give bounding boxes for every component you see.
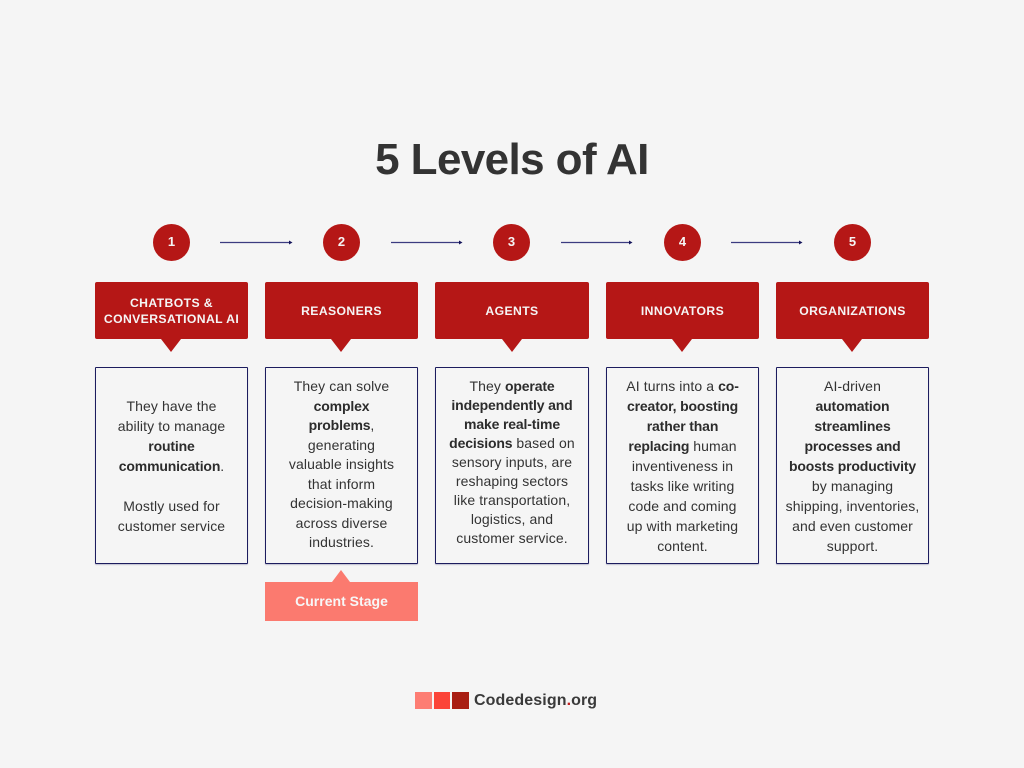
step 5 circle xyxy=(834,224,871,261)
panel: innovators description: creator, boosting xyxy=(627,398,738,414)
panel: organizations description: support. xyxy=(827,538,878,554)
panel: reasoners description: They can solve xyxy=(294,378,389,394)
panel: innovators description xyxy=(606,367,759,564)
header: chatbots xyxy=(95,282,248,339)
panel: reasoners description: industries. xyxy=(309,534,374,550)
panel: chatbots description: customer service xyxy=(118,518,225,534)
header: organizations xyxy=(776,282,929,339)
panel: organizations description: streamlines xyxy=(814,418,891,434)
header: reasoners xyxy=(265,282,418,339)
panel: reasoners description: complex xyxy=(314,398,369,414)
panel: innovators description: replacing human xyxy=(628,438,737,454)
logo squares xyxy=(415,692,469,709)
panel: innovators description: tasks like writing xyxy=(631,478,734,494)
header: chatbots: CHATBOTS & xyxy=(130,296,213,310)
header: innovators: INNOVATORS xyxy=(641,304,724,318)
title: 5 Levels of AI xyxy=(375,135,649,184)
panel: innovators description: content. xyxy=(657,538,708,554)
step 3 circle xyxy=(493,224,530,261)
header: chatbots: CONVERSATIONAL AI xyxy=(104,312,239,326)
panel: innovators description: inventiveness in xyxy=(632,458,733,474)
panel: organizations description: automation xyxy=(816,398,889,414)
panel: reasoners description: decision-making xyxy=(290,495,393,511)
step 1 circle: 1 xyxy=(168,234,175,249)
panel: agents description: decisions based on xyxy=(449,435,575,451)
panel: reasoners description: that inform xyxy=(308,476,375,492)
panel: chatbots description: routine xyxy=(148,438,195,454)
panel: organizations description xyxy=(776,367,929,564)
arrow 1 to 2 xyxy=(220,240,292,244)
panel: organizations description: by managing xyxy=(812,478,893,494)
panel: chatbots description: They have the xyxy=(126,398,217,414)
panel: agents description: They operate xyxy=(469,378,555,394)
step 1 circle xyxy=(153,224,190,261)
panel: agents description: like transportation, xyxy=(454,492,570,508)
header: agents xyxy=(435,282,589,339)
panel: agents description: customer service. xyxy=(456,530,568,546)
current stage pointer xyxy=(332,570,350,582)
header: reasoners: REASONERS xyxy=(301,304,382,318)
pointer: organizations xyxy=(842,339,862,352)
logo: Codedesign.org xyxy=(415,692,597,709)
current stage label: Current Stage xyxy=(295,593,388,609)
header: agents: AGENTS xyxy=(485,304,539,318)
step 2 circle: 2 xyxy=(338,234,345,249)
panel: agents description: logistics, and xyxy=(471,511,553,527)
step 4 circle: 4 xyxy=(679,234,686,249)
arrow 2 to 3 xyxy=(391,240,462,244)
logo wordmark: Codedesign.org xyxy=(474,692,597,709)
header: organizations: ORGANIZATIONS xyxy=(799,304,906,318)
panel: chatbots description xyxy=(95,367,248,564)
arrow 4 to 5 xyxy=(731,240,802,244)
panel: organizations description: shipping, inventories, xyxy=(786,498,919,514)
panel: innovators description: up with marketing xyxy=(627,518,738,534)
current stage label xyxy=(265,582,418,621)
arrow 3 to 4 xyxy=(561,240,632,244)
panel: agents description: make real-time xyxy=(464,416,560,432)
panel: reasoners description: valuable insights xyxy=(289,456,394,472)
panel: organizations description: AI-driven xyxy=(824,378,881,394)
panel: agents description: independently and xyxy=(451,397,573,413)
step 2 circle xyxy=(323,224,360,261)
panel: chatbots description: ability to manage xyxy=(118,418,225,434)
panel: reasoners description: problems, xyxy=(309,417,374,433)
header: innovators xyxy=(606,282,759,339)
panel: innovators description: AI turns into a co- xyxy=(626,378,739,394)
pointer: reasoners xyxy=(331,339,351,352)
panel: agents description: sensory inputs, are xyxy=(452,454,572,470)
panel: chatbots description: communication. xyxy=(119,458,224,474)
panel: reasoners description: across diverse xyxy=(296,515,387,531)
panel: chatbots description: Mostly used for xyxy=(123,498,220,514)
panel: innovators description: rather than xyxy=(647,418,718,434)
panel: organizations description: processes and xyxy=(804,438,901,454)
step 5 circle: 5 xyxy=(849,234,856,249)
panel: reasoners description xyxy=(265,367,418,564)
panel: innovators description: code and coming xyxy=(628,498,737,514)
panel: reasoners description: generating xyxy=(308,437,375,453)
step 4 circle xyxy=(664,224,701,261)
panel: organizations description: boosts productivity xyxy=(789,458,916,474)
panel: organizations description: and even customer xyxy=(792,518,913,534)
pointer: agents xyxy=(502,339,522,352)
panel: agents description: reshaping sectors xyxy=(456,473,568,489)
panel: agents description xyxy=(435,367,589,564)
pointer: chatbots xyxy=(161,339,181,352)
step 3 circle: 3 xyxy=(508,234,515,249)
pointer: innovators xyxy=(672,339,692,352)
